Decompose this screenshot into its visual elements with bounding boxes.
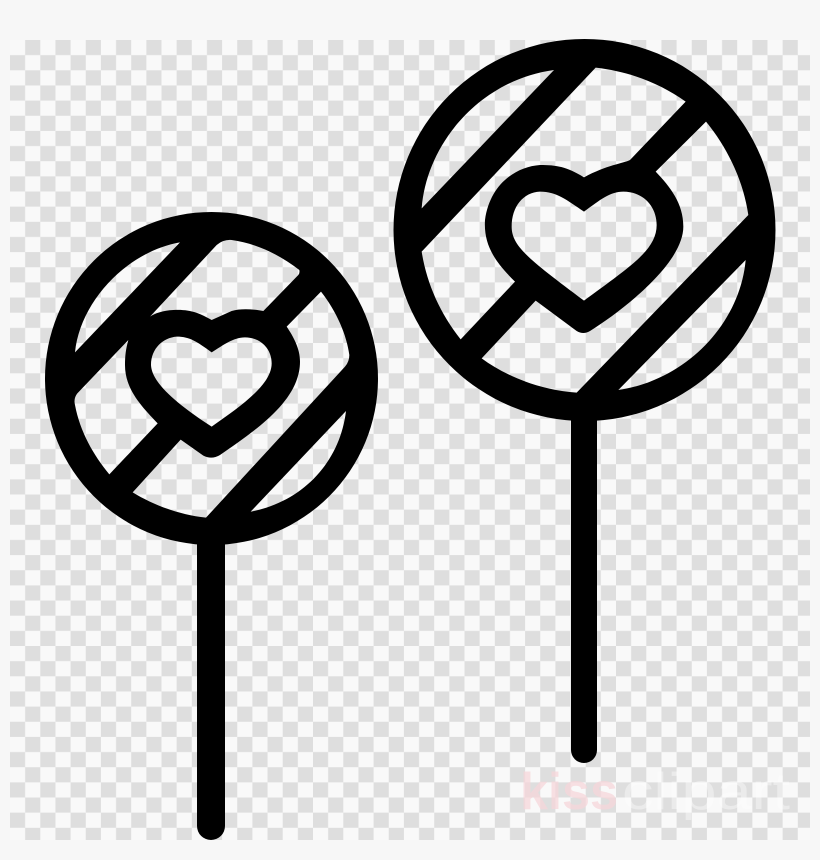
large lollipop candy — [393, 39, 775, 421]
watermark word: clipart: clipart — [622, 763, 791, 821]
large lollipop stick — [571, 405, 597, 763]
watermark word: kiss: kiss — [520, 763, 618, 821]
small lollipop candy — [45, 212, 378, 545]
small lollipop stick — [197, 530, 225, 840]
icon: small lollipop with heart — [45, 212, 378, 840]
watermark — [520, 763, 791, 821]
icon: large lollipop with heart — [393, 39, 775, 763]
